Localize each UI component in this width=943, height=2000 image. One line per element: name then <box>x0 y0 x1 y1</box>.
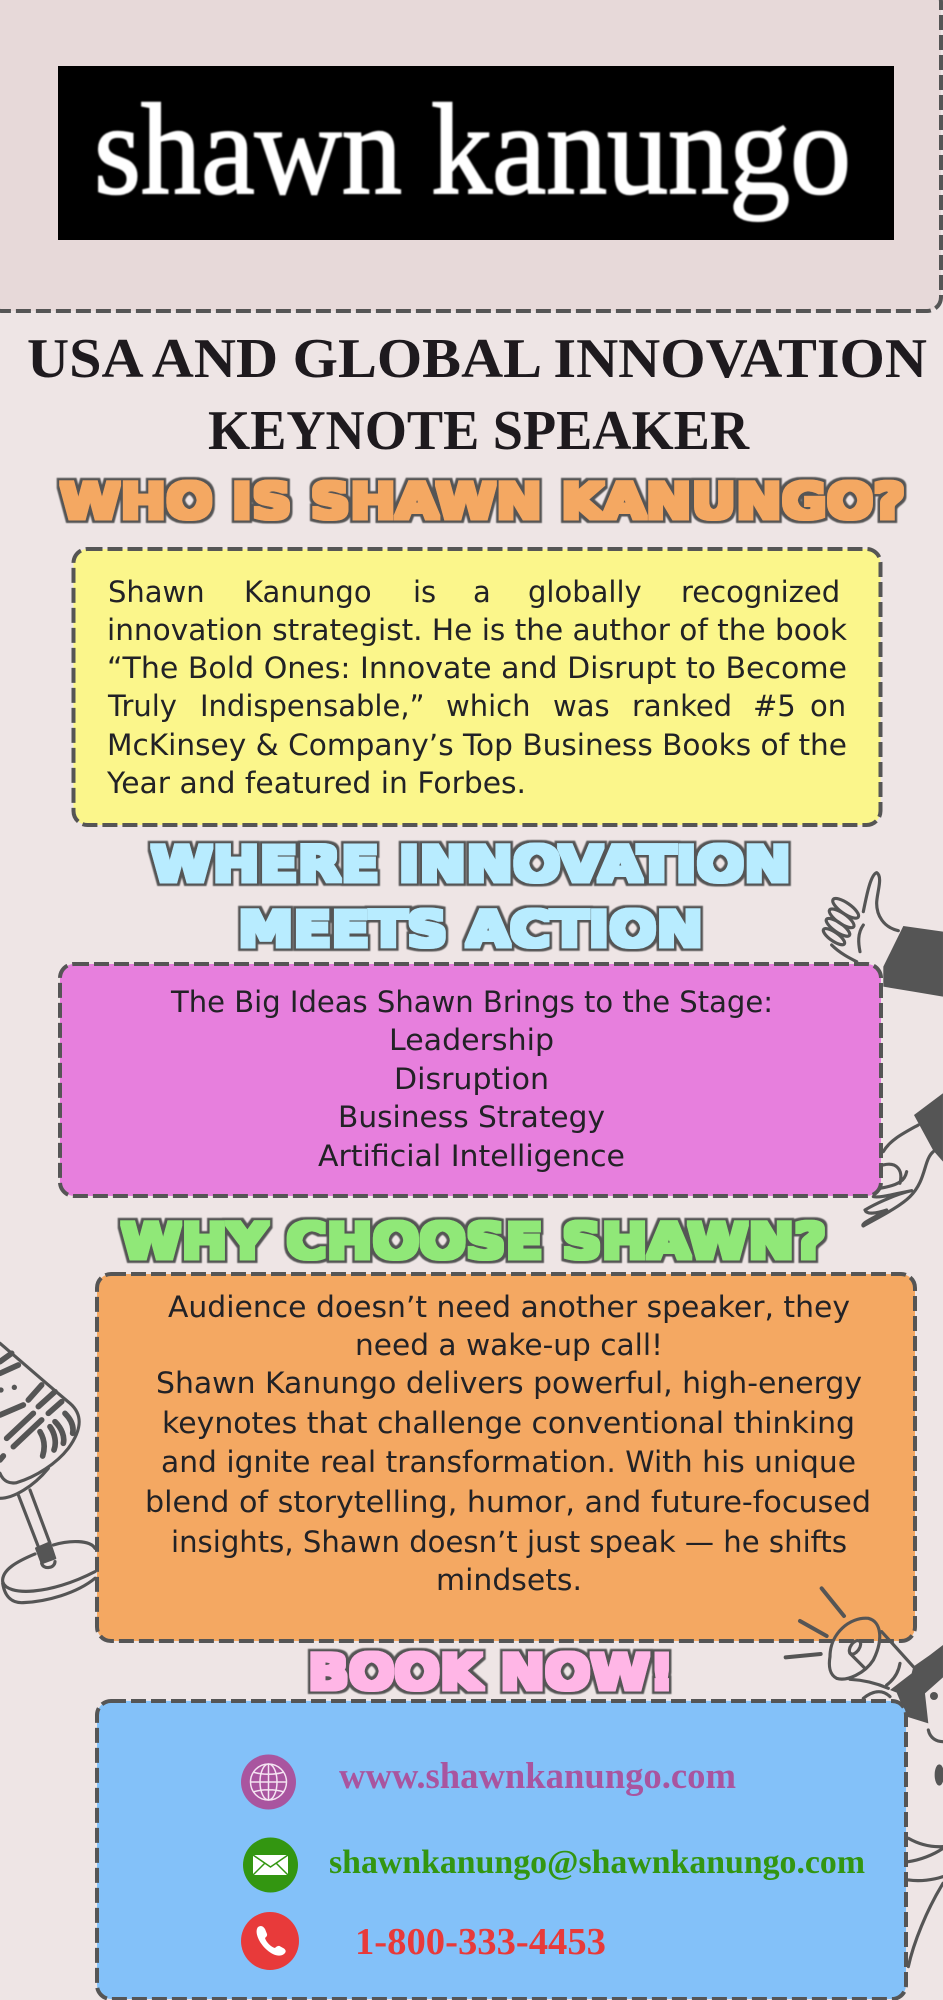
text: why choose copy: and ignite real transformation. With his unique <box>161 1445 856 1479</box>
icon: envelope <box>243 1838 298 1892</box>
text: big ideas list: Business Strategy <box>338 1100 605 1134</box>
icon: microphone <box>0 1343 95 1603</box>
text: why choose copy: keynotes that challenge conventional thinking <box>162 1406 855 1440</box>
title: USA AND GLOBAL INNOVATION <box>27 328 927 390</box>
text: why choose copy: need a wake-up call! <box>355 1328 663 1362</box>
text: biography: ranked <box>632 689 732 723</box>
text: biography: a <box>473 575 491 609</box>
text: biography: is <box>413 575 436 609</box>
text: biography: Indispensable,” <box>200 689 425 723</box>
text: why choose copy: mindsets. <box>436 1563 582 1597</box>
text: biography: globally <box>528 575 642 609</box>
text: biography: #5 <box>753 689 796 723</box>
text: big ideas list: Leadership <box>389 1023 554 1057</box>
text: why choose copy <box>145 1290 871 1597</box>
panel: book now contacts <box>97 1701 906 1999</box>
text: biography: which <box>446 689 530 723</box>
logo: shawn kanungo <box>58 66 894 240</box>
text: website: www.shawnkanungo.com <box>339 1755 736 1796</box>
icon: person with megaphone <box>786 1588 943 1967</box>
icon: okay hand <box>863 1093 943 1226</box>
text: big ideas list: Disruption <box>394 1062 549 1096</box>
heading: why choose shawn: WHY CHOOSE SHAWN? <box>121 1214 826 1270</box>
text: biography: Kanungo <box>244 575 372 609</box>
text: biography: Year and featured in Forbes. <box>106 766 526 800</box>
logo: shawn kanungo: kanungo <box>431 78 851 222</box>
panel: who is shawn <box>74 549 880 825</box>
title <box>27 328 927 462</box>
text: why choose copy: insights, Shawn doesn’t just speak — he shifts <box>171 1525 847 1559</box>
text: biography: Shawn <box>108 575 205 609</box>
heading: book now: BOOK NOW! <box>308 1645 674 1701</box>
icon: phone <box>241 1912 299 1970</box>
text: big ideas list: Artificial Intelligence <box>318 1139 625 1173</box>
text: biography: was <box>553 689 610 723</box>
text: big ideas list: The Big Ideas Shawn Brings to the Stage: <box>170 985 773 1019</box>
text: phone number: 1-800-333-4453 <box>355 1921 606 1963</box>
text: big ideas list <box>170 985 773 1173</box>
heading: who is shawn kanungo: WHO IS SHAWN KANUNGO? <box>60 474 905 530</box>
heading: where innovation meets action: MEETS ACTION <box>238 902 703 958</box>
text: why choose copy: Shawn Kanungo delivers powerful, high-energy <box>156 1366 862 1400</box>
heading: where innovation meets action: WHERE INNOVATION <box>151 837 791 893</box>
panel: why choose shawn <box>97 1274 915 1641</box>
title: KEYNOTE SPEAKER <box>208 400 750 462</box>
text: why choose copy: Audience doesn’t need another speaker, they <box>168 1290 850 1324</box>
logo: shawn kanungo: shawn <box>94 78 402 222</box>
text: why choose copy: blend of storytelling, humor, and future-focused <box>145 1485 871 1519</box>
text: email: shawnkanungo@shawnkanungo.com <box>329 1844 865 1881</box>
text: biography: on <box>810 689 846 723</box>
panel: big ideas <box>60 964 881 1196</box>
icon: globe <box>241 1754 296 1810</box>
text: biography <box>106 575 847 800</box>
text: biography: recognized <box>681 575 840 609</box>
panel: header band <box>0 0 941 311</box>
icon: thumbs-up hand <box>821 873 943 997</box>
heading: where innovation meets action <box>151 837 791 958</box>
text: biography: McKinsey & Company’s Top Business Books of the <box>107 728 847 762</box>
text: biography: Truly <box>107 689 177 723</box>
text: biography: “The Bold Ones: Innovate and Disrupt to Become <box>107 651 847 685</box>
text: biography: innovation strategist. He is the author of the book <box>107 613 847 647</box>
